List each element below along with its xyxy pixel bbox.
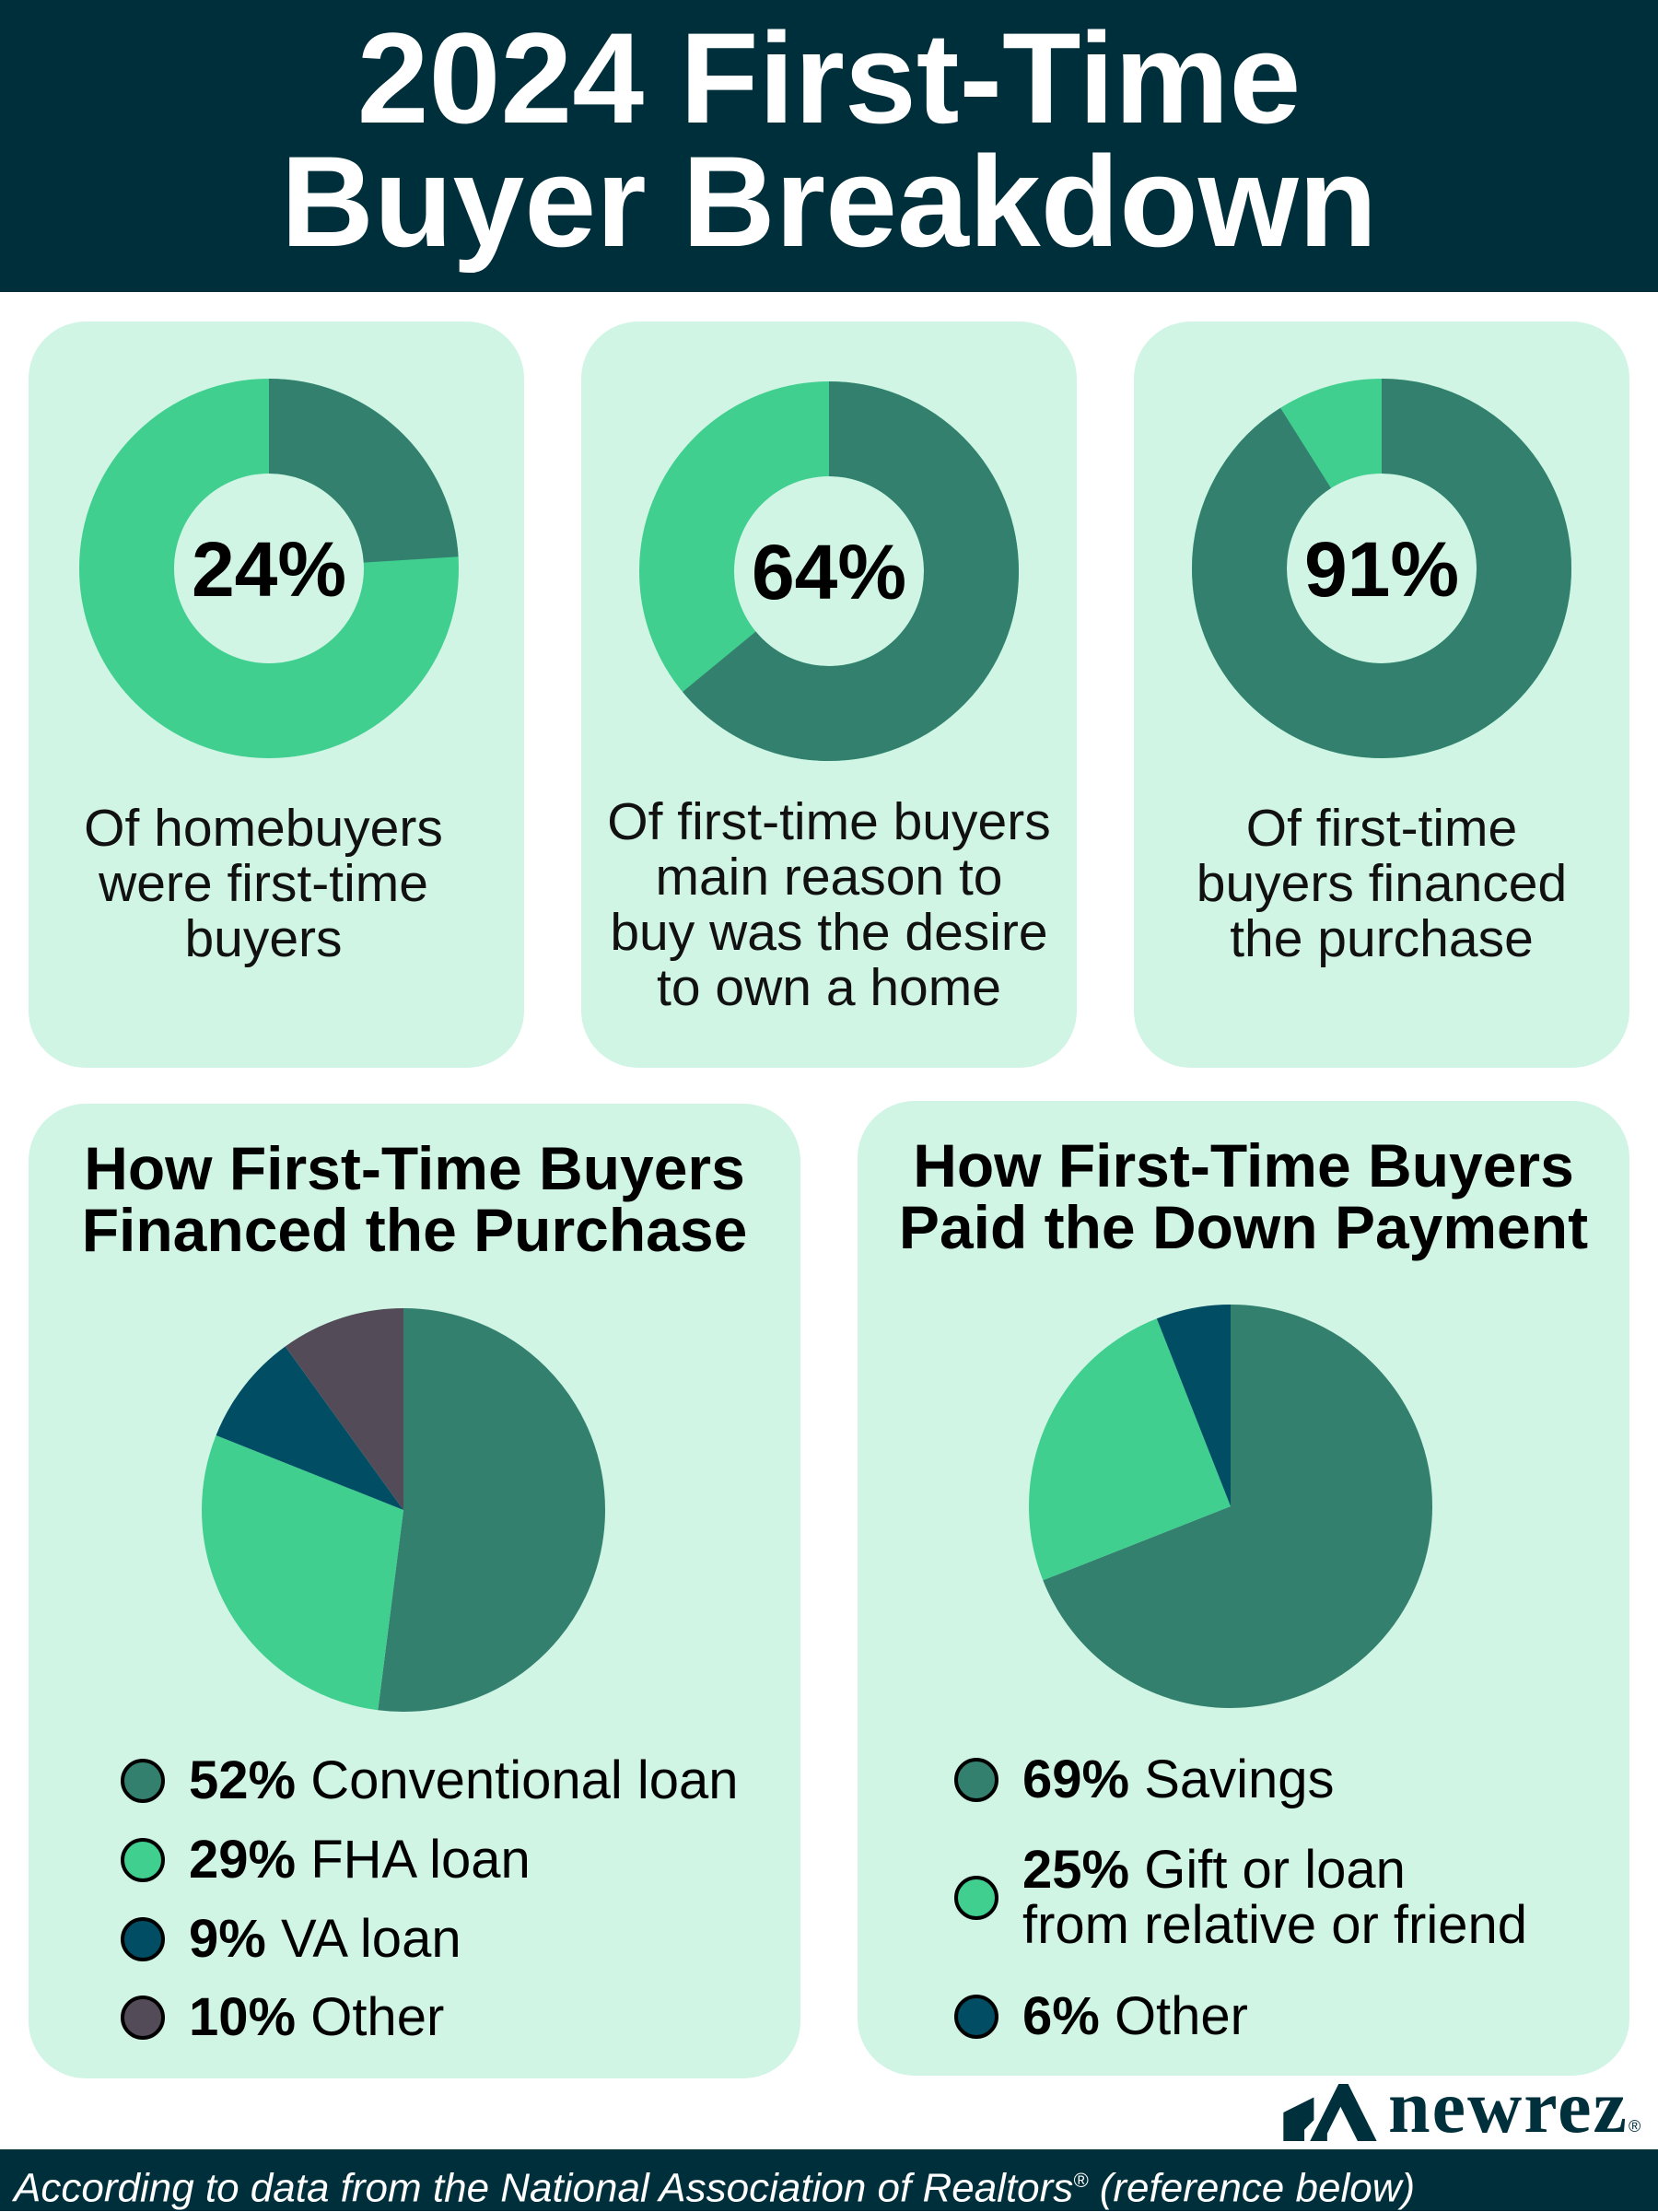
pie chart: financing: [202, 1308, 605, 1712]
title: [281, 6, 1377, 274]
footer band: [0, 2149, 1658, 2211]
heading: How First-Time Buyers: [84, 1134, 745, 1202]
legend: 10% Other: [189, 1987, 444, 2047]
donut chart 24%: [79, 379, 459, 758]
heading: Paid the Down Payment: [899, 1193, 1588, 1261]
panel: reason to buy: [581, 322, 1077, 1068]
logo: newrez: [1283, 2065, 1642, 2148]
title: Buyer Breakdown: [281, 129, 1377, 274]
panel: financing types: [29, 1104, 800, 2078]
legend: 69% Savings: [1022, 1750, 1335, 1809]
caption: Of first-time buyers: [607, 792, 1051, 851]
caption: the purchase: [1230, 909, 1534, 968]
caption: buy was the desire: [610, 903, 1048, 962]
donut chart 64%: [639, 381, 1019, 761]
caption: Of homebuyers: [84, 799, 443, 858]
caption: [84, 799, 443, 968]
panel: first-time buyers share: [29, 322, 524, 1068]
heading: [899, 1131, 1588, 1261]
caption: main reason to: [655, 848, 1003, 907]
pie chart: down payment: [1029, 1305, 1432, 1708]
title: 2024 First-Time: [357, 6, 1301, 150]
heading: Financed the Purchase: [82, 1196, 747, 1264]
caption: were first-time: [99, 854, 428, 913]
donut chart 91%: [1192, 379, 1571, 758]
panel: down payment: [858, 1101, 1629, 2076]
caption: to own a home: [657, 958, 1001, 1017]
legend: 9% VA loan: [189, 1909, 461, 1969]
legend: [121, 1750, 739, 2047]
caption: buyers financed: [1197, 854, 1567, 913]
legend: 25% Gift or loan: [1022, 1840, 1406, 1900]
heading: How First-Time Buyers: [913, 1131, 1574, 1200]
legend: 52% Conventional loan: [189, 1750, 739, 1810]
caption: [1197, 799, 1567, 968]
donut chart 64%: 64%: [752, 529, 906, 615]
panel: financed purchase: [1134, 322, 1629, 1068]
legend: from relative or friend: [1022, 1895, 1527, 1955]
donut chart 91%: 91%: [1304, 526, 1459, 613]
source note: According to data from the National Association of Realtors® (reference below): [14, 2166, 1415, 2211]
icon: house roof: [1283, 2084, 1377, 2141]
caption: Of first-time: [1246, 799, 1517, 858]
caption: buyers: [184, 909, 343, 968]
legend: 29% FHA loan: [189, 1830, 531, 1890]
logo text: newrez®: [1388, 2065, 1642, 2148]
legend: [954, 1750, 1527, 2046]
donut chart 24%: 24%: [192, 526, 346, 613]
header band: [0, 0, 1658, 292]
legend: 6% Other: [1022, 1986, 1248, 2046]
caption: [607, 792, 1051, 1017]
heading: [82, 1134, 747, 1264]
